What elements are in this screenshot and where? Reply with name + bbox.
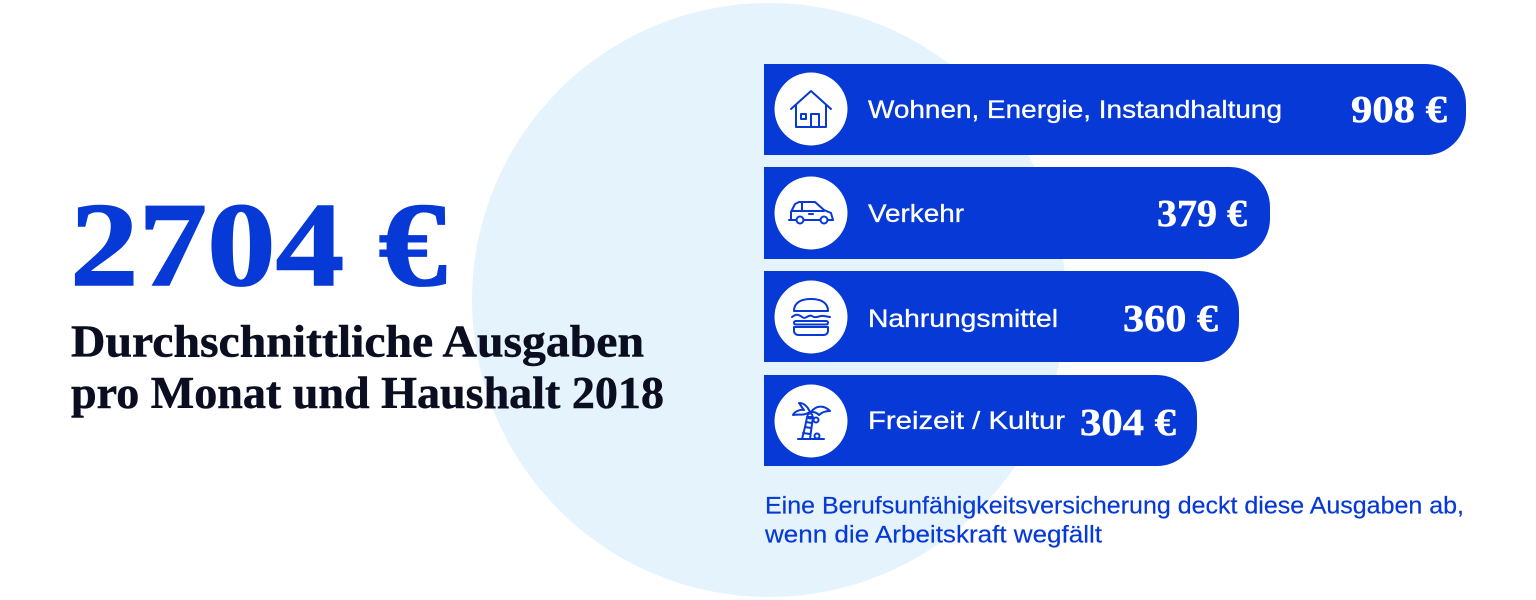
bar: Freizeit / Kultur bbox=[764, 375, 1197, 466]
bar: Wohnen, Energie, Instandhaltung: Wohnen, Energie, Instandhaltung bbox=[868, 96, 1282, 124]
bar: Wohnen, Energie, Instandhaltung: 908 € bbox=[1351, 89, 1447, 131]
background circle bbox=[472, 3, 1066, 597]
footnote: Eine Berufsunfähigkeitsversicherung deckt diese Ausgaben ab, bbox=[765, 492, 1464, 520]
icon: car bbox=[789, 202, 833, 224]
footnote: wenn die Arbeitskraft wegfällt bbox=[764, 522, 1102, 548]
bar: Verkehr: Verkehr bbox=[868, 200, 964, 228]
total amount: 2704 € bbox=[70, 178, 447, 311]
bar: Nahrungsmittel: Nahrungsmittel bbox=[868, 305, 1058, 333]
heading: pro Monat und Haushalt 2018 bbox=[71, 368, 664, 418]
icon: burger bbox=[792, 299, 830, 335]
bar: Nahrungsmittel: 360 € bbox=[1123, 298, 1218, 340]
bar: Nahrungsmittel bbox=[764, 271, 1239, 362]
icon: palm tree bbox=[793, 403, 830, 439]
bar: Wohnen, Energie, Instandhaltung bbox=[764, 64, 1466, 155]
bar: Verkehr: 379 € bbox=[1157, 193, 1247, 235]
footnote bbox=[764, 492, 1464, 548]
heading bbox=[71, 316, 664, 418]
bar: Verkehr bbox=[764, 167, 1270, 259]
bar: Freizeit / Kultur: 304 € bbox=[1080, 402, 1176, 444]
heading: Durchschnittliche Ausgaben bbox=[71, 316, 644, 366]
icon: house bbox=[791, 91, 831, 127]
bar: Freizeit / Kultur: Freizeit / Kultur bbox=[868, 407, 1065, 435]
